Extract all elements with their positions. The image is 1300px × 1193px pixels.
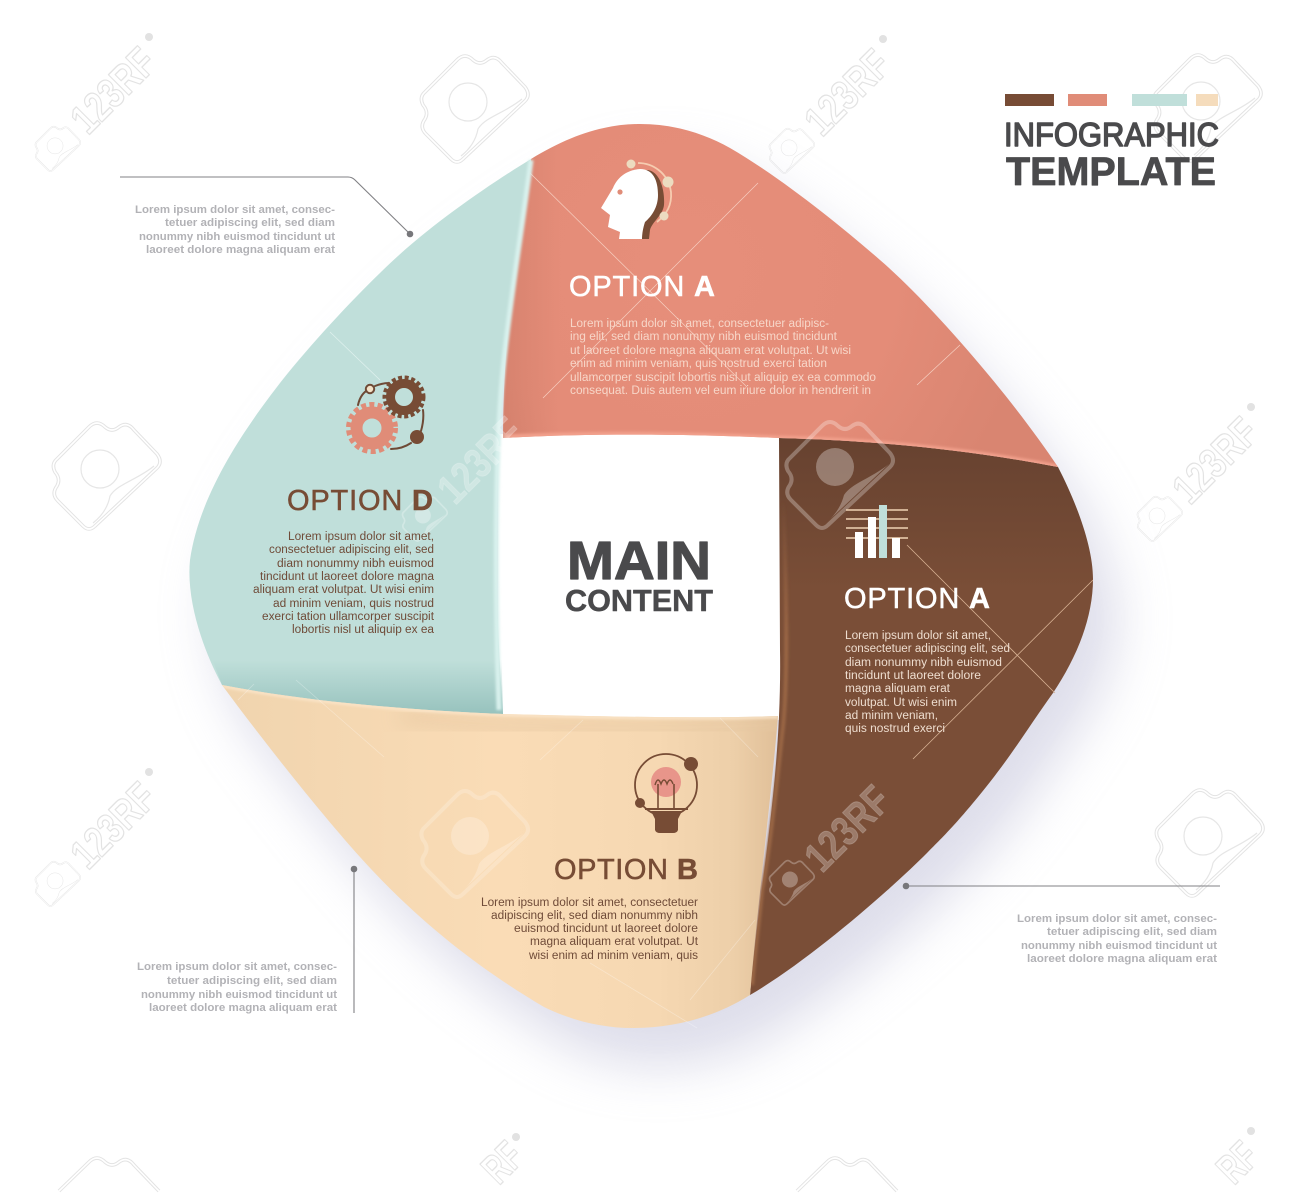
legend and template title: INFOGRAPHIC [1004, 116, 1219, 153]
body text: ullamcorper suscipit lobortis nisl ut aliquip ex ea commodo [570, 372, 876, 384]
background watermarks: RF [472, 1132, 532, 1192]
body text: adipiscing elit, sed diam nonummy nibh [491, 910, 698, 922]
body text: magna aliquam erat volutpat. Ut [530, 936, 699, 948]
callout: right: tetuer adipiscing elit, sed diam [1047, 926, 1217, 938]
callout: right: laoreet dolore magna aliquam erat [1027, 953, 1217, 965]
background watermarks: 123RF [61, 773, 165, 877]
body text: ing elit, sed diam nonummy nibh euismod tincidunt [570, 331, 838, 343]
body text: consectetuer adipiscing elit, sed [269, 544, 434, 556]
body text [570, 318, 876, 397]
body text: diam nonummy nibh euismod [845, 657, 1002, 669]
body text: quis nostrud exerci [845, 723, 945, 735]
callout: bottom left [137, 866, 357, 1014]
icon: head with nodes [601, 160, 674, 239]
watermark on brown: 123RF [795, 776, 899, 880]
heading: option D: OPTION D [287, 485, 433, 517]
background watermarks: RF [1207, 1132, 1267, 1192]
body text: tincidunt ut laoreet dolore [845, 670, 981, 682]
callout: right [903, 883, 1220, 965]
body text [845, 630, 1010, 735]
body text: ad minim veniam, quis nostrud [273, 598, 434, 610]
main content title: MAIN [567, 531, 711, 591]
callout: bottom left: nonummy nibh euismod tincidunt ut [141, 989, 337, 1001]
body text: volutpat. Ut wisi enim [845, 697, 957, 709]
callout: right: nonummy nibh euismod tincidunt ut [1021, 940, 1217, 952]
legend and template title: TEMPLATE [1006, 150, 1216, 194]
heading: option B: OPTION B [554, 854, 698, 886]
callout: top left: tetuer adipiscing elit, sed diam [165, 217, 335, 229]
body text: Lorem ipsum dolor sit amet, consectetuer [481, 897, 698, 909]
panel: option B beige [222, 680, 790, 1028]
body text [253, 531, 435, 636]
body text: consequat. Duis autem vel eum iriure dolor in hendrerit in [570, 385, 871, 397]
body text: Lorem ipsum dolor sit amet, consectetuer adipisc- [570, 318, 829, 330]
body text: enim ad minim veniam, quis nostrud exerci tation [570, 358, 827, 370]
background watermarks: 123RF [1163, 408, 1267, 512]
soft drop shadow [213, 162, 1117, 1066]
background watermarks: 123RF [795, 40, 899, 144]
body text: lobortis nisl ut aliquip ex ea [292, 624, 435, 636]
callout: top left: Lorem ipsum dolor sit amet, consec- [135, 204, 335, 216]
icon: gears [348, 378, 424, 452]
callout: top left [120, 177, 413, 256]
body text: Lorem ipsum dolor sit amet, [845, 630, 991, 642]
callout: bottom left: laoreet dolore magna aliquam erat [149, 1002, 337, 1014]
body text [481, 897, 699, 962]
body text: ad minim veniam, [845, 710, 938, 722]
panel: option A brown [750, 422, 1093, 995]
background watermarks: 123RF [61, 38, 165, 142]
main content title: CONTENT [565, 583, 713, 618]
callout: bottom left: tetuer adipiscing elit, sed diam [167, 975, 337, 987]
body text: aliquam erat volutpat. Ut wisi enim [253, 584, 434, 596]
panel: main content centre [498, 434, 784, 720]
panel: option D teal [189, 159, 532, 714]
body text: euismod tincidunt ut laoreet dolore [514, 923, 698, 935]
callout: right: Lorem ipsum dolor sit amet, consec- [1017, 913, 1217, 925]
body text: exerci tation ullamcorper suscipit [262, 611, 435, 623]
callout: top left: nonummy nibh euismod tincidunt ut [139, 231, 335, 243]
body text: wisi enim ad minim veniam, quis [528, 950, 698, 962]
main content title [565, 531, 713, 618]
body text: consectetuer adipiscing elit, sed [845, 643, 1010, 655]
body text: magna aliquam erat [845, 683, 951, 695]
callout: bottom left: Lorem ipsum dolor sit amet, consec- [137, 961, 337, 973]
body text: ut laoreet dolore magna aliquam erat volutpat. Ut wisi [570, 345, 851, 357]
body text: diam nonummy nibh euismod [277, 558, 434, 570]
watermark egg on salmon edge [806, 420, 884, 444]
watermark egg on beige [421, 791, 528, 897]
watermark on teal: 123RF [428, 408, 532, 512]
heading: option A: OPTION A [844, 583, 990, 615]
watermark on teal [402, 408, 532, 541]
body text: Lorem ipsum dolor sit amet, [288, 531, 434, 543]
legend and template title [1004, 94, 1219, 194]
body text: tincidunt ut laoreet dolore magna [260, 571, 435, 583]
icon: light bulb [635, 754, 698, 833]
icon: bar chart [846, 505, 908, 558]
callout: top left: laoreet dolore magna aliquam erat [146, 244, 335, 256]
panel: option A salmon [503, 124, 1058, 467]
heading: option A: OPTION A [569, 271, 715, 303]
